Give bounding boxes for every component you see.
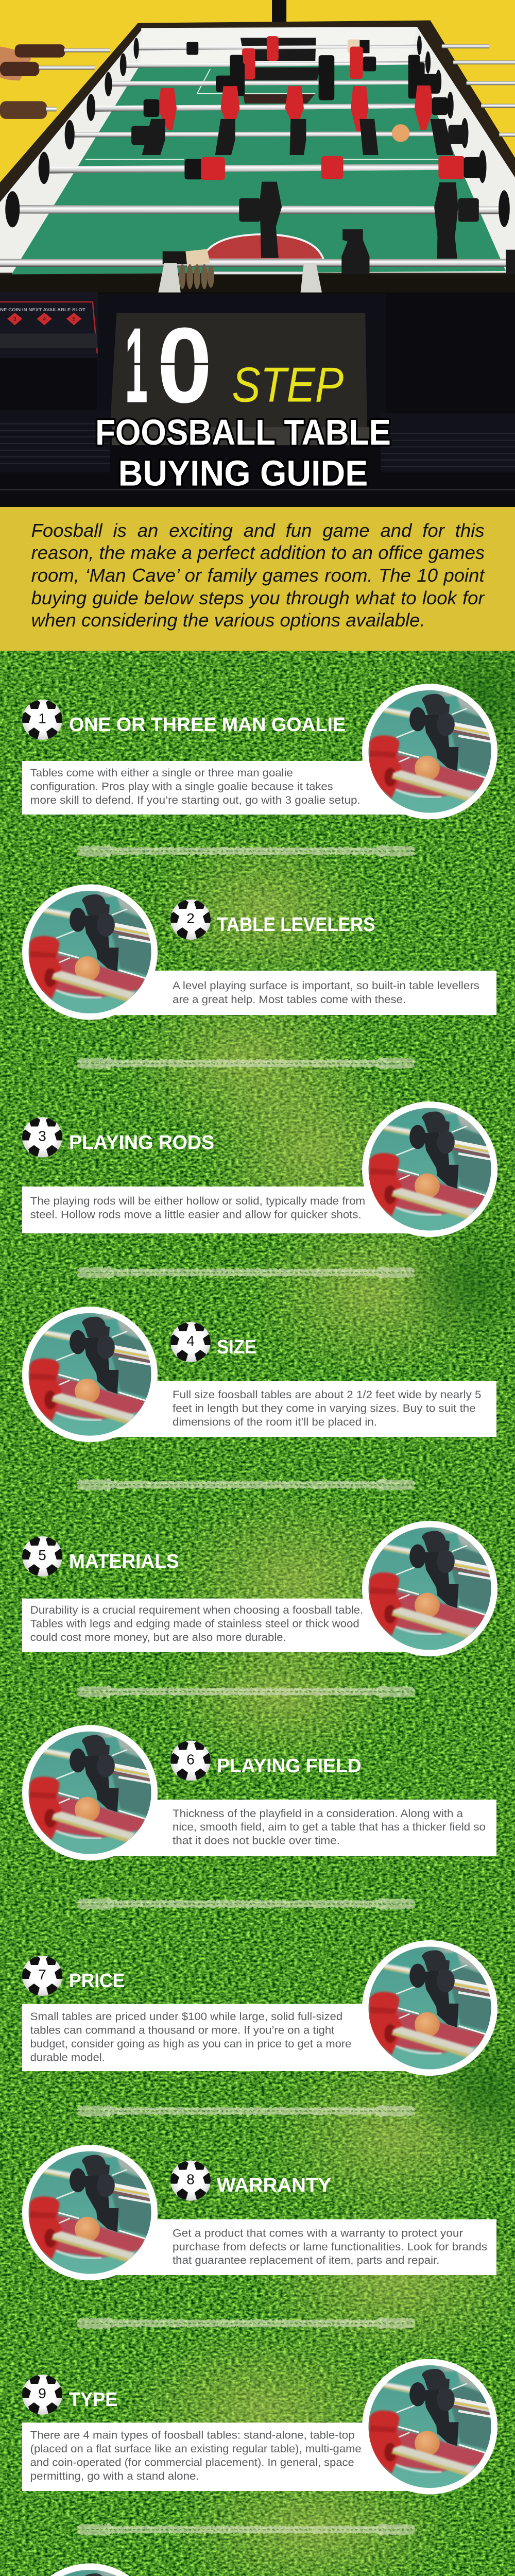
step 1 ball xyxy=(20,698,66,740)
step 5: materials xyxy=(20,1521,497,1656)
step 4 ball: 4 xyxy=(186,1333,195,1349)
background: grass field xyxy=(0,629,515,2576)
step 9 ball: 9 xyxy=(38,2385,46,2401)
step 2 heading: TABLE LEVELERS xyxy=(217,914,375,936)
step 2: table levelers xyxy=(22,884,496,1020)
step 8 ball xyxy=(168,2159,214,2201)
step 3 body: The playing rods will be either hollow or solid, typically made from xyxy=(30,1195,365,1207)
step 4 photo xyxy=(22,1307,158,1442)
step 3 text panel xyxy=(22,1187,414,1233)
step 2 text panel xyxy=(103,971,496,1015)
intro band background xyxy=(0,507,515,651)
coin panel: 5 xyxy=(73,316,76,322)
step 9 text panel xyxy=(22,2422,414,2491)
step 6 photo xyxy=(22,1725,158,1860)
divider ropes xyxy=(77,845,415,2536)
step 9 body xyxy=(30,2429,362,2482)
step 9 body: and coin-operated (for commercial placement). In general, space xyxy=(30,2457,354,2469)
step 5 body: Tables with legs and edging made of stainless steel or thick wood xyxy=(30,1618,359,1630)
step 1: one or three man goalie xyxy=(20,684,497,819)
centre circle xyxy=(202,234,323,260)
step 5 body: could cost more money, but are also more durable. xyxy=(30,1632,286,1643)
step 1 text panel xyxy=(22,761,414,815)
step 3 photo xyxy=(362,1101,497,1237)
step 9 photo xyxy=(362,2359,497,2495)
step 4: size xyxy=(22,1307,496,1442)
big number 10: 1 xyxy=(125,306,148,426)
players rod 6 red xyxy=(184,156,483,180)
coin panel: 4 xyxy=(43,316,46,322)
step 9 heading: TYPE xyxy=(69,2389,117,2411)
coin panel: NE COIN IN NEXT AVAILABLE SLOT xyxy=(0,307,85,312)
players rod 4 red xyxy=(144,86,448,131)
intro paragraph xyxy=(31,519,485,631)
step 7 ball: 7 xyxy=(38,1967,46,1982)
step 7 body: Small tables are priced under $100 while large, solid full-sized xyxy=(30,2011,342,2023)
step 3: playing rods xyxy=(20,1101,497,1237)
intro paragraph: reason, the make a perfect addition to an office games xyxy=(31,542,485,563)
step 7 body: tables can command a thousand or more. If you’re on a tight xyxy=(30,2025,334,2037)
step 3 ball xyxy=(20,1116,66,1157)
step 9: type xyxy=(20,2359,497,2495)
step 6: playing field xyxy=(22,1725,496,1860)
step 2 body xyxy=(173,980,479,1006)
table front and scoreboard plate xyxy=(0,263,515,507)
step 8 body: Get a product that comes with a warranty to protect your xyxy=(173,2227,463,2239)
title xyxy=(95,412,391,494)
rods right extensions xyxy=(442,44,515,137)
step 2 photo xyxy=(22,884,158,1020)
step 4 body xyxy=(173,1389,481,1428)
step 7 heading: PRICE xyxy=(69,1970,125,1992)
step 5 ball: 5 xyxy=(38,1547,46,1563)
step 6 text panel xyxy=(103,1800,496,1856)
step 2 ball: 2 xyxy=(186,910,195,926)
step 8 body: purchase from defects or lame functionalities. Look for brands xyxy=(173,2241,487,2253)
step 10 photo xyxy=(22,2564,158,2576)
step 4 text panel xyxy=(103,1381,496,1437)
step 1 body: Tables come with either a single or three man goalie xyxy=(30,767,293,779)
step 6 body: nice, smooth field, aim to get a table that has a thicker field so xyxy=(173,1821,486,1833)
step 5 photo xyxy=(362,1521,497,1656)
step 5 body xyxy=(30,1604,363,1643)
intro paragraph: when considering the various options available. xyxy=(31,609,425,631)
step 3 ball: 3 xyxy=(38,1128,46,1144)
step 8 body xyxy=(173,2227,487,2266)
step 1 ball: 1 xyxy=(38,710,46,726)
step 7 body: durable model. xyxy=(30,2052,105,2063)
coin panel xyxy=(0,292,98,358)
big number 10: 0 xyxy=(157,306,212,426)
step label: STEP xyxy=(232,357,344,412)
rods and bumpers xyxy=(0,45,515,275)
players rod 5 black xyxy=(131,119,468,155)
step 9 ball xyxy=(20,2373,66,2415)
step 8: warranty xyxy=(22,2145,496,2280)
intro paragraph: room, ‘Man Cave’ or family games room. The 10 point xyxy=(31,565,485,586)
step 7 text panel xyxy=(22,2004,414,2071)
step 1 body: more skill to defend. If you’re starting out, go with 3 goalie setup. xyxy=(30,794,360,806)
step 3 body: steel. Hollow rods move a little easier and allow for quicker shots. xyxy=(30,1209,362,1221)
title: BUYING GUIDE xyxy=(118,453,368,494)
step 8 ball: 8 xyxy=(186,2172,195,2188)
step 6 heading: PLAYING FIELD xyxy=(217,1755,362,1777)
step 7 body xyxy=(30,2011,351,2063)
step 8 text panel xyxy=(103,2219,496,2275)
players rod 7-8 black xyxy=(163,182,515,275)
step 4 body: feet in length but they come in varying sizes. Buy to suit the xyxy=(173,1403,476,1415)
step 4 body: Full size foosball tables are about 2 1/2 feet wide by nearly 5 xyxy=(173,1389,481,1401)
step 1 body xyxy=(30,767,360,806)
step 7 ball xyxy=(20,1954,66,1996)
step 2 body: are a great help. Most tables come with these. xyxy=(173,994,406,1006)
step 1 heading: ONE OR THREE MAN GOALIE xyxy=(69,714,346,736)
step 6 body xyxy=(173,1808,486,1847)
coin panel: 3 xyxy=(13,316,16,322)
step 6 body: that it does not buckle over time. xyxy=(173,1835,340,1847)
step 4 heading: SIZE xyxy=(217,1336,256,1358)
step 6 ball xyxy=(168,1739,214,1781)
title: FOOSBALL TABLE xyxy=(95,412,391,452)
step 8 photo xyxy=(22,2145,158,2280)
step 4 ball xyxy=(168,1320,214,1362)
big number 10 xyxy=(123,306,214,426)
step 3 heading: PLAYING RODS xyxy=(69,1132,214,1154)
step 5 body: Durability is a crucial requirement when choosing a foosball table. xyxy=(30,1604,363,1616)
intro paragraph: buying guide below steps you through what to look for xyxy=(31,587,485,608)
step 8 body: that guarantee replacement of item, parts and repair. xyxy=(173,2255,440,2266)
step 7 photo xyxy=(362,1940,497,2076)
step 5 ball xyxy=(20,1535,66,1577)
step 9 body: (placed on a flat surface like an existing regular table), multi-game xyxy=(30,2443,362,2455)
step 10: best brands xyxy=(22,2564,496,2576)
step 2 ball xyxy=(168,898,214,940)
step 1 body: configuration. Pros play with a single goalie because it takes xyxy=(30,781,333,792)
step 8 heading: WARRANTY xyxy=(217,2175,331,2196)
step 9 body: permitting, go with a stand alone. xyxy=(30,2470,199,2482)
step 7 body: budget, consider going as high as you can in price to get a more xyxy=(30,2038,351,2050)
players rod 1-3 xyxy=(186,36,440,100)
intro paragraph: Foosball is an exciting and fun game and for this xyxy=(31,519,485,541)
hero: foosball table photo xyxy=(0,0,515,507)
step 3 body xyxy=(30,1195,365,1221)
step 1 photo xyxy=(362,684,497,819)
step 5 text panel xyxy=(22,1599,414,1652)
handles left xyxy=(0,44,110,119)
step 6 body: Thickness of the playfield in a consideration. Along with a xyxy=(173,1808,463,1820)
step 5 heading: MATERIALS xyxy=(69,1551,179,1572)
step 7: price xyxy=(20,1940,497,2076)
step 4 body: dimensions of the room it’ll be placed in. xyxy=(173,1416,377,1428)
step 2 body: A level playing surface is important, so built-in table levellers xyxy=(173,980,479,992)
step 9 body: There are 4 main types of foosball tables: stand-alone, table-top xyxy=(30,2429,355,2441)
step 6 ball: 6 xyxy=(186,1752,195,1767)
